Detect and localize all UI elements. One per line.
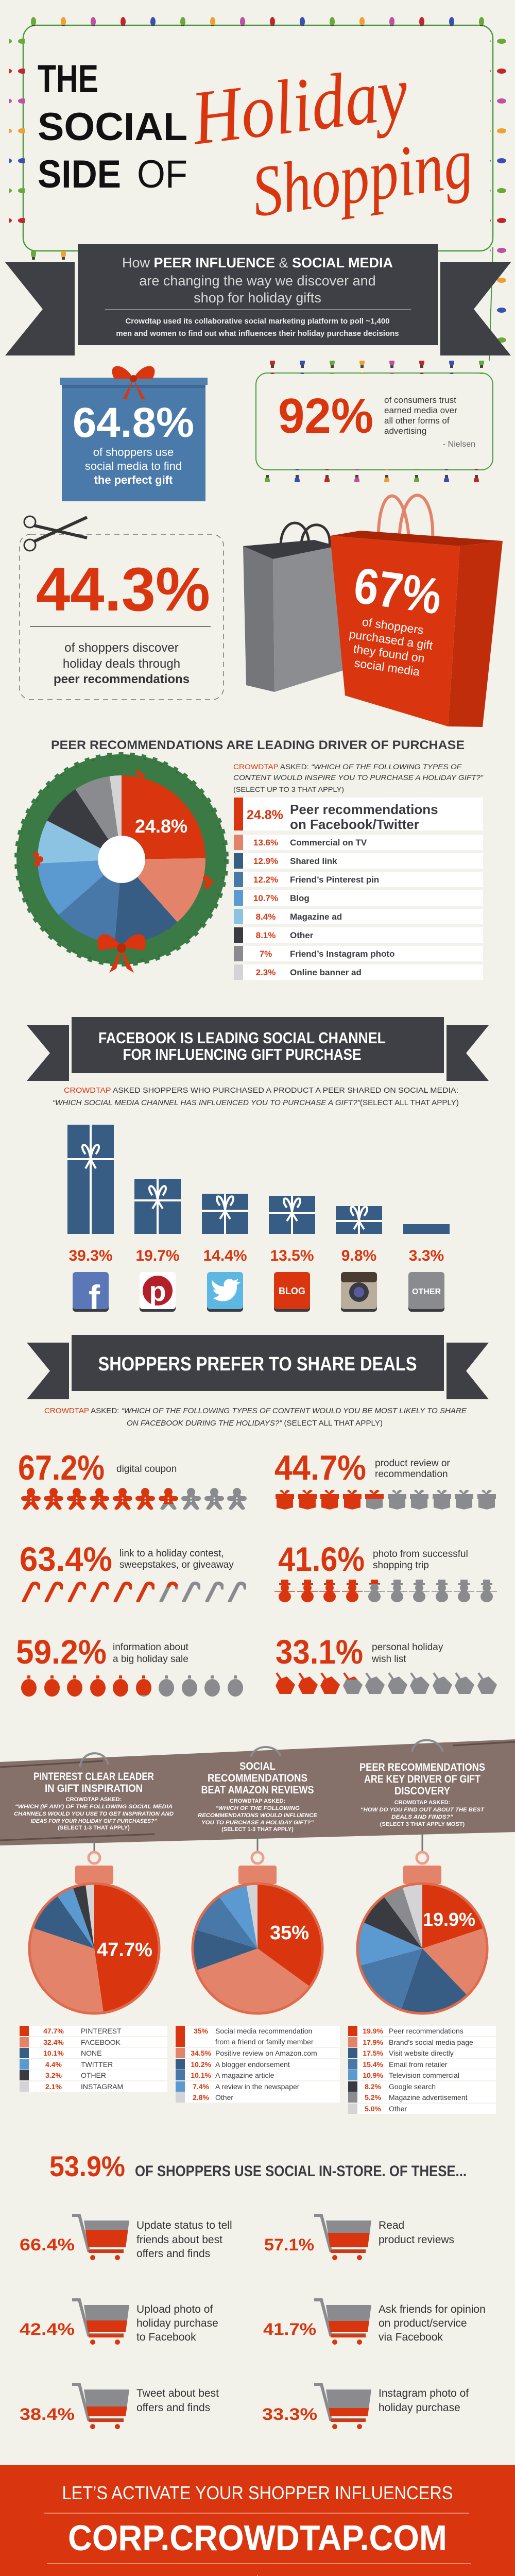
bar chart: gift boxes by channel: 19.7% (135, 1247, 180, 1264)
branch band with section headings: RECOMMENDATIONS WOULD INFLUENCE (198, 1812, 318, 1819)
legend: social recommendations: 34.5% (191, 2049, 212, 2057)
stat: 64.8% gift box: 64.8% (73, 399, 194, 446)
legend: social recommendations: A review in the newspaper (215, 2082, 300, 2091)
banner: Facebook leading channel: FACEBOOK IS LEADING SOCIAL CHANNEL (98, 1029, 386, 1047)
banner: shoppers prefer to share deals: SHOPPERS PREFER TO SHARE DEALS (98, 1353, 417, 1375)
legend: social recommendations: 2.8% (193, 2093, 210, 2102)
stat: 64.8% gift box: the perfect gift (94, 473, 173, 486)
footer call to action (0, 2465, 515, 2576)
ornament pie: social recommendations: 35% (270, 1922, 309, 1944)
question text: section 1: CONTENT WOULD INSPIRE YOU TO PURCHASE A HOLIDAY GIFT?” (233, 773, 484, 782)
intro banner: How PEER INFLUENCE & SOCIAL MEDIA (122, 255, 393, 270)
legend: gift discovery: 17.9% (363, 2038, 384, 2046)
legend: content types: on Facebook/Twitter (290, 817, 419, 832)
legend: Pinterest: 3.2% (45, 2071, 62, 2079)
icon: bow (97, 934, 146, 973)
stat row: 63.4% contest link (20, 1540, 245, 1601)
heading: peer recommendations driver: PEER RECOMMENDATIONS ARE LEADING DRIVER OF PURCHASE (51, 738, 465, 752)
legend: gift discovery: 8.2% (365, 2082, 382, 2091)
shopping bags: 67%: of shoppers (362, 615, 424, 637)
cart stat: 57.1% (264, 2215, 454, 2260)
branch band with section headings: “WHICH (IF ANY) OF THE FOLLOWING SOCIAL MEDIA (15, 1804, 173, 1810)
title: Holiday Shopping script: Holiday (186, 50, 413, 161)
legend: social recommendations: from a friend or family member (215, 2038, 314, 2046)
legend: Pinterest: 4.4% (45, 2060, 62, 2069)
legend: gift discovery: 5.2% (365, 2093, 382, 2102)
legend: content types: 12.9% (253, 856, 278, 866)
stat: 64.8% gift box (60, 366, 208, 501)
branch band with section headings: (SELECT 1-3 THAT APPLY) (221, 1826, 294, 1833)
legend: gift discovery: 5.0% (365, 2105, 382, 2113)
legend: gift discovery: 17.5% (363, 2049, 384, 2057)
legend: gift discovery (348, 2026, 496, 2114)
cart stat: 33.3% (262, 2384, 469, 2429)
bar chart: gift boxes by channel: 14.4% (203, 1247, 247, 1264)
legend: content types: 12.2% (253, 875, 278, 885)
cart stat: 41.7%: on product/service (379, 2317, 467, 2329)
cart stat: 41.7% (263, 2300, 486, 2345)
legend: content types: Magazine ad (290, 912, 342, 922)
legend: content types: 13.6% (253, 838, 278, 848)
stat row: 41.6% shopping photo: 41.6% (278, 1540, 365, 1578)
branch band with section headings: CROWDTAP ASKED: (66, 1797, 122, 1803)
legend: content types: Blog (290, 893, 310, 903)
branch band with section headings: PINTEREST CLEAR LEADER (33, 1771, 154, 1783)
shopping bags: 67%: 67% (351, 556, 445, 625)
legend: gift discovery: Google search (389, 2082, 436, 2091)
title: The Social Side of: THE (38, 57, 98, 101)
cart stat: 42.4%: 42.4% (20, 2320, 75, 2338)
legend: social recommendations: 10.2% (191, 2060, 212, 2069)
cart stat: 38.4% (20, 2384, 219, 2429)
cart stat: 41.7%: Ask friends for opinion (379, 2303, 486, 2315)
stat row: 33.1% wish list: 33.1% (276, 1633, 363, 1671)
legend: gift discovery: Magazine advertisement (389, 2093, 468, 2102)
stat: 92% lights frame: of consumers trust (384, 395, 456, 405)
shopping bags: 67%: purchased a gift (348, 627, 434, 652)
legend: gift discovery: Visit website directly (389, 2049, 454, 2057)
ornament pie: Pinterest: 47.7% (97, 1939, 152, 1961)
stat: 92% lights frame: - Nielsen (443, 440, 475, 449)
stat row: 44.7% product review (275, 1455, 496, 1510)
legend: content types: 2.3% (256, 968, 276, 977)
legend: social recommendations: Social media recommendation (215, 2027, 312, 2035)
bar chart: gift boxes by channel: 3.3% (409, 1247, 444, 1264)
legend: content types: 10.7% (253, 893, 278, 903)
branch band with section headings: PEER RECOMMENDATIONS (359, 1761, 485, 1773)
branch band with section headings: CROWDTAP ASKED: (230, 1798, 285, 1804)
intro banner: are changing the way we discover and (139, 273, 376, 289)
stat row: 41.6% shopping photo: shopping trip (373, 1560, 429, 1571)
branch band with section headings: DISCOVERY (394, 1785, 450, 1797)
legend: gift discovery: Peer recommendations (389, 2027, 464, 2035)
legend: social recommendations: 7.4% (193, 2082, 210, 2091)
intro banner: men and women to find out what influences their holiday purchase decisions (116, 329, 399, 338)
stat row: 59.2% big holiday sale: information about (113, 1642, 189, 1653)
stat row: 44.7% product review: recommendation (375, 1469, 448, 1480)
cart stat: 38.4%: Tweet about best (136, 2387, 219, 2399)
legend: content types: 24.8% (247, 808, 283, 822)
legend: gift discovery: Other (389, 2105, 407, 2113)
title: The Social Side of (38, 57, 187, 196)
stat: 44.3% coupon: holiday deals through (63, 657, 180, 671)
stat: 92% lights frame: all other forms of (384, 416, 450, 426)
cart stat: 66.4%: Update status to tell (136, 2219, 232, 2231)
stat row: 67.2% digital coupon (19, 1455, 247, 1510)
legend: social recommendations: Positive review on Amazon.com (215, 2049, 317, 2057)
banner: Facebook leading channel (27, 1017, 489, 1081)
icons: social channels (73, 1272, 444, 1316)
stat: 92% lights frame: 92% (278, 388, 373, 444)
legend: content types: 8.4% (256, 912, 276, 922)
bar chart: gift boxes by channel: 13.5% (270, 1247, 314, 1264)
stat: 44.3% coupon: 44.3% (36, 555, 210, 624)
stat row: 44.7% product review: product review or (375, 1458, 450, 1469)
banner: shoppers prefer to share deals (27, 1335, 489, 1399)
legend: Pinterest: 32.4% (43, 2038, 64, 2046)
title: The Social Side of: SIDE (38, 152, 121, 196)
stat: 92% lights frame: advertising (384, 426, 426, 436)
stat row: 41.6% shopping photo: photo from successful (373, 1549, 468, 1560)
legend: Pinterest: NONE (81, 2049, 101, 2057)
stat: 44.3% coupon: of shoppers discover (64, 641, 179, 655)
cart stat: 57.1%: product reviews (379, 2234, 454, 2246)
legend: social recommendations: A magazine article (215, 2071, 274, 2079)
wreath donut chart (18, 755, 226, 973)
cart stat: 66.4% (20, 2215, 232, 2260)
branch band with section headings: BEAT AMAZON REVIEWS (201, 1784, 314, 1796)
legend: content types: Other (290, 930, 314, 940)
icons: social channels: f (89, 1278, 100, 1316)
branch band with section headings: CROWDTAP ASKED: (394, 1800, 450, 1806)
stat row: 63.4% contest link: 63.4% (20, 1540, 112, 1578)
question text: section 2: CROWDTAP ASKED SHOPPERS WHO PURCHASED A PRODUCT A PEER SHARED ON SOCIAL MEDIA: (64, 1086, 458, 1095)
legend: gift discovery: Brand's social media page (389, 2038, 473, 2046)
ornament pie: social recommendations (193, 1832, 322, 2013)
question text: section 3: ON FACEBOOK DURING THE HOLIDAYS?” (SELECT ALL THAT APPLY) (127, 1419, 383, 1428)
legend: content types: Online banner ad (290, 968, 362, 977)
branch band with section headings: IDEAS FOR YOUR HOLIDAY GIFT PURCHASES?” (31, 1818, 157, 1824)
legend: social recommendations: 35% (194, 2027, 209, 2035)
stat: 44.3% coupon (20, 516, 224, 700)
stat: 92% lights frame: earned media over (384, 405, 457, 415)
heading: 53.9% use social in-store: 53.9% (49, 2150, 125, 2182)
stat row: 59.2% big holiday sale: a big holiday sale (113, 1654, 188, 1665)
legend: content types (234, 798, 483, 980)
legend: Pinterest: INSTAGRAM (81, 2082, 123, 2091)
cart stat: 42.4% (20, 2300, 218, 2345)
cart stat: 41.7%: 41.7% (263, 2320, 316, 2338)
legend: content types: Friend’s Instagram photo (290, 949, 394, 959)
branch band with section headings: SOCIAL (239, 1760, 276, 1772)
legend: content types: Friend’s Pinterest pin (290, 875, 379, 885)
legend: Pinterest: FACEBOOK (81, 2038, 121, 2046)
branch band with section headings: IN GIFT INSPIRATION (45, 1783, 143, 1794)
branch band with section headings (0, 1739, 515, 1845)
legend: gift discovery: 19.9% (363, 2027, 384, 2035)
cart stat: 38.4%: 38.4% (20, 2405, 75, 2424)
legend: gift discovery: Television commercial (389, 2071, 459, 2079)
stat row: 33.1% wish list (276, 1639, 497, 1694)
legend: Pinterest: PINTEREST (81, 2027, 122, 2035)
footer call to action: CORP.CROWDTAP.COM (68, 2518, 447, 2558)
cart stat: 42.4%: to Facebook (136, 2331, 196, 2343)
branch band with section headings: DEALS AND FINDS?” (391, 1814, 454, 1820)
cart stat: 33.3%: Instagram photo of (379, 2387, 469, 2399)
stat: 64.8% gift box: of shoppers use (93, 446, 174, 459)
shopping bags: 67%: social media (354, 656, 421, 679)
stat row: 59.2% big holiday sale (16, 1639, 243, 1697)
stat row: 67.2% digital coupon: digital coupon (116, 1464, 177, 1475)
question text: section 1: (SELECT UP TO 3 THAT APPLY) (233, 785, 344, 793)
legend: gift discovery: 10.9% (363, 2071, 384, 2079)
title: The Social Side of: OF (137, 152, 187, 196)
cart stat: 42.4%: holiday purchase (136, 2317, 218, 2329)
wreath donut chart: 24.8% (135, 816, 187, 837)
heading: 53.9% use social in-store (49, 2150, 467, 2182)
intro banner: Crowdtap used its collaborative social marketing platform to poll ~1,400 (125, 317, 390, 326)
branch band with section headings: (SELECT 1-3 THAT APPLY) (58, 1825, 130, 1831)
stat row: 33.1% wish list: wish list (371, 1654, 406, 1665)
legend: social recommendations: A blogger endorsement (215, 2060, 290, 2069)
branch band with section headings: YOU TO PURCHASE A HOLIDAY GIFT?” (201, 1820, 314, 1826)
icon: scissors (24, 516, 87, 551)
footer call to action: LET’S ACTIVATE YOUR SHOPPER INFLUENCERS (62, 2482, 453, 2503)
branch band with section headings: RECOMMENDATIONS (208, 1772, 307, 1784)
banner: Facebook leading channel: FOR INFLUENCING GIFT PURCHASE (123, 1045, 362, 1063)
legend: content types: 8.1% (256, 930, 276, 940)
stat: 44.3% coupon: peer recommendations (54, 672, 190, 686)
branch band with section headings: “HOW DO YOU FIND OUT ABOUT THE BEST (360, 1807, 485, 1813)
cart stat: 66.4%: 66.4% (20, 2235, 75, 2254)
cart stat: 57.1%: Read (379, 2219, 404, 2231)
stat row: 44.7% product review: 44.7% (274, 1448, 366, 1487)
stat row: 59.2% big holiday sale: 59.2% (16, 1633, 107, 1671)
legend: content types: Shared link (290, 856, 337, 866)
heading: 53.9% use social in-store: OF SHOPPERS USE SOCIAL IN-STORE. OF THESE... (135, 2163, 467, 2180)
branch band with section headings: CHANNELS WOULD YOU USE TO GET INSPIRATION AND (14, 1811, 174, 1817)
stat row: 33.1% wish list: personal holiday (372, 1642, 443, 1653)
legend: content types: Peer recommendations (290, 802, 438, 817)
shopping bags: 67% (243, 495, 503, 727)
cart stat: 66.4%: offers and finds (136, 2248, 210, 2260)
legend: Pinterest: OTHER (81, 2071, 106, 2079)
legend: content types: 7% (260, 949, 272, 959)
bar chart: gift boxes by channel (67, 1125, 450, 1264)
title: The Social Side of: SOCIAL (38, 105, 187, 149)
icons: social channels: p (149, 1276, 166, 1307)
question text: section 3 (44, 1406, 467, 1428)
cart stat: 33.3%: 33.3% (262, 2405, 317, 2424)
legend: Pinterest: TWITTER (81, 2060, 113, 2069)
legend: social recommendations: 10.1% (191, 2071, 212, 2079)
icons: social channels: BLOG (279, 1286, 305, 1296)
legend: content types: Commercial on TV (290, 838, 367, 848)
question text: section 2: “WHICH SOCIAL MEDIA CHANNEL HAS INFLUENCED YOU TO PURCHASE A GIFT?” (SELECT ALL THAT APPLY) (53, 1098, 459, 1107)
bar chart: gift boxes by channel: 9.8% (341, 1247, 376, 1264)
stat: 64.8% gift box: social media to find (85, 460, 182, 472)
shopping bags: 67%: they found on (353, 642, 425, 665)
ornament pie: peer recommendations discovery (357, 1832, 487, 2013)
branch band with section headings: (SELECT 3 THAT APPLY MOST) (380, 1821, 465, 1827)
cart stat: 42.4%: Upload photo of (136, 2303, 213, 2315)
stat: 92% lights frame (256, 361, 493, 482)
stat row: 67.2% digital coupon: 67.2% (18, 1448, 105, 1487)
stat row: 63.4% contest link: link to a holiday contest, (119, 1548, 224, 1559)
legend: social recommendations (176, 2026, 340, 2103)
legend: Pinterest: 47.7% (43, 2027, 64, 2035)
legend: social recommendations: Other (215, 2093, 233, 2102)
question text: section 1 (233, 762, 484, 793)
question text: section 1: CROWDTAP ASKED: “WHICH OF THE FOLLOWING TYPES OF (233, 762, 462, 771)
cart stat: 57.1%: 57.1% (264, 2235, 314, 2254)
title: Holiday Shopping script (186, 50, 477, 232)
branch band with section headings: “WHICH OF THE FOLLOWING (215, 1805, 300, 1811)
legend: Pinterest: 10.1% (43, 2049, 64, 2057)
legend: Pinterest: 2.1% (45, 2082, 62, 2091)
title frame with holiday lights (9, 13, 506, 361)
question text: section 3: CROWDTAP ASKED: “WHICH OF THE FOLLOWING TYPES OF CONTENT WOULD YOU BE MOST LIKELY TO SHARE (44, 1406, 467, 1415)
legend: Pinterest (20, 2026, 167, 2092)
intro banner (5, 244, 511, 355)
cart stat: 41.7%: via Facebook (379, 2331, 443, 2343)
ornament pie: peer recommendations discovery: 19.9% (423, 1909, 475, 1930)
legend: gift discovery: Email from retailer (389, 2060, 448, 2069)
stat row: 63.4% contest link: sweepstakes, or giveaway (119, 1560, 234, 1570)
bar chart: gift boxes by channel: 39.3% (68, 1247, 113, 1264)
cart stat: 33.3%: holiday purchase (379, 2402, 460, 2414)
legend: gift discovery: 15.4% (363, 2060, 384, 2069)
ornament pie: Pinterest (29, 1838, 159, 2013)
question text: section 2 (53, 1086, 459, 1107)
stat row: 41.6% shopping photo (274, 1547, 497, 1602)
branch band with section headings: ARE KEY DRIVER OF GIFT (364, 1773, 480, 1785)
icons: social channels: OTHER (412, 1287, 441, 1296)
cart stat: 38.4%: offers and finds (136, 2402, 210, 2414)
intro banner: shop for holiday gifts (194, 290, 321, 306)
cart stat: 66.4%: friends about best (136, 2234, 222, 2246)
